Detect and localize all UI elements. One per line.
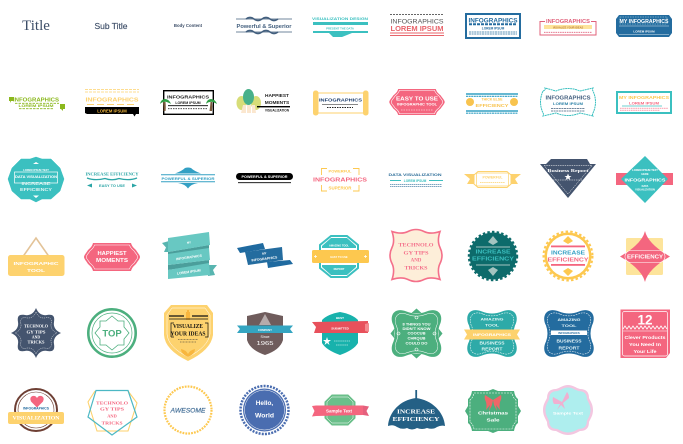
badge: blue frame: [466, 14, 520, 38]
badge: teal diamond on pink band: DATA: [642, 184, 649, 188]
badge: green scalloped card: COOCUB: [408, 332, 426, 336]
badge: green scalloped card: DIDN'T KNOW: [402, 327, 430, 331]
badge: business report triangle: Business Report: [548, 168, 589, 173]
badge: green octagon with pink ribbon: [312, 395, 369, 425]
badge: pink wavy frame: GY TIPS: [404, 252, 429, 256]
badge: green speech bubbles: INFOGRAPHICS: [13, 98, 60, 104]
badge: infographics lorem ipsum red: [390, 14, 444, 36]
badge: dark teal seal: [469, 232, 517, 280]
badge: powerful and superior ornament: POWERFUL & SUPERIOR: [162, 177, 215, 181]
badge: happiest moments plaque: MOMENTS: [96, 258, 129, 264]
badge: business report triangle: [540, 159, 596, 198]
badge: pink frame with yellow bar: [540, 18, 596, 35]
badge: brown shield with ribbon: 1965: [256, 341, 274, 347]
badge: yellow shield: YOUR IDEAS: [170, 330, 206, 338]
badge: teal octagon with yellow band: EASY TO USE: [330, 255, 348, 259]
badge: dark blue quatrefoil: AND: [32, 336, 40, 340]
icon: red bow: [485, 395, 501, 411]
icon: trees and figures: [236, 89, 261, 113]
badge: yellow and black bar: INFOGRAPHICS: [86, 98, 139, 104]
badge: infographics lorem ipsum red: LOREM IPSUM: [390, 26, 444, 33]
badge: my infographics blue: LOREM IPSUM: [633, 30, 655, 34]
badge: yellow shield: VISUALIZE: [173, 323, 203, 330]
badge: happiest moments plaque: HAPPIEST: [97, 251, 127, 257]
badge: yellow and black bar: [85, 90, 139, 116]
badge: pentagons: GY TIPS: [100, 406, 125, 412]
badge: teal scalloped card with yellow ribbon: BUSINESS: [480, 340, 505, 346]
badge: pink wavy frame: TRICKS: [404, 266, 428, 272]
badge: blue frame: INFOGRAPHICS: [468, 18, 518, 24]
badge: teal scalloped card with yellow ribbon: REPORT: [482, 346, 503, 352]
badge: dark blue quatrefoil: [11, 308, 61, 358]
badge: teal wavy frame: INFOGRAPHICS: [546, 96, 591, 102]
badge: teal shield with red ribbon: [312, 312, 369, 355]
badge: teal scalloped card with yellow ribbon: TOOL: [485, 322, 500, 328]
badge: pink frame with yellow bar: INFOGRAPHICS: [546, 19, 591, 25]
badge: pentagons: TECHNOLO: [96, 400, 129, 406]
badge: pink 12 card: Your Life: [634, 349, 657, 354]
badge: powerful and superior: [236, 18, 292, 34]
badge: data visualization: DATA VISUALIZATION: [388, 173, 442, 177]
badge: teal folded ribbon: LOREM IPSUM: [177, 268, 201, 276]
badge: powerful and superior ornament: [161, 168, 215, 188]
badge: powerful and superior: Powerful & Superior: [236, 24, 292, 30]
badge: teal shield with red ribbon: BEST: [336, 316, 344, 320]
badge: teal wavy frame: LOREM IPSUM: [553, 102, 583, 106]
badge: black pill: [236, 173, 293, 183]
badge: green speech bubbles: LOREM IPSUM: [18, 103, 54, 108]
badge: awesome dotted circle: AWESOME: [169, 408, 206, 414]
badge: green scalloped card: CHRQUB: [408, 336, 426, 340]
badge: pink star on yellow square: EFFICIENCY: [627, 254, 664, 260]
badge: teal arrow banner: VISUALIZATION DESIGN: [312, 17, 369, 21]
title: Title: [22, 18, 50, 34]
badge: pink 12 card: [620, 310, 670, 358]
badge: hello world seal: [240, 386, 288, 434]
badge: black frame with palm trees: [160, 91, 217, 114]
badge: blue scalloped card: [544, 310, 594, 357]
badge: dark blue quatrefoil: GY TIPS: [26, 330, 46, 334]
badge: teal scalloped card with yellow ribbon: INFOGRAPHICS: [473, 333, 512, 337]
badge: blue folded ribbon: MY: [262, 251, 267, 256]
body content: Body Content: [174, 23, 203, 28]
badge: umbrella: INCREASE: [397, 410, 435, 416]
badge: dark teal seal: INCREASE: [476, 250, 511, 256]
badge: umbrella: EFFICIENCY: [392, 417, 440, 423]
badge: my infographics blue: MY INFOGRAPHICS: [620, 19, 669, 25]
badge: teal wavy frame: [540, 88, 596, 116]
icon: shells: [466, 98, 518, 106]
badge: teal arrow banner: PRESENT THE DATA: [326, 26, 354, 30]
badge: pink 12 card: Clever Products: [624, 335, 666, 340]
badge: black frame with palm trees: INFOGRAPHICS: [167, 94, 210, 100]
badge: teal folded ribbon: [162, 232, 217, 279]
badge: hello world seal: Hello,: [256, 400, 273, 407]
badge: christmas green label: [465, 389, 521, 433]
badge: teal shield with red ribbon: SUBMITTED: [331, 326, 350, 330]
badge: dark blue quatrefoil: TECHNOLO: [24, 324, 48, 328]
badge: hanging sign: TOOL: [27, 268, 45, 274]
badge: brown shield with ribbon: [237, 312, 293, 355]
badge: blue frame: LOREM IPSUM: [482, 26, 505, 30]
badge: blue and yellow shells: THICK ELSE: [482, 98, 503, 102]
badge: teal octagon with yellow band: [312, 236, 369, 277]
badge: pentagons: TRICKS: [102, 420, 123, 426]
badge: pink scalloped label with bow: Sample Text: [553, 412, 584, 416]
badge: christmas green label: Sale: [487, 418, 500, 423]
badge: green scalloped card: COULD DO: [406, 342, 428, 346]
badge: teal diamond on pink band: [616, 156, 673, 203]
badge: awesome dotted circle: [164, 386, 212, 434]
badge: pink wavy frame: AND: [411, 258, 422, 264]
badge: teal octagon data visualization: LOREM IPSUM TEXT: [23, 168, 49, 172]
badge: blue scalloped card: TOOL: [562, 323, 577, 328]
badge: green speech bubbles: [9, 97, 65, 111]
badge: teal diamond on pink band: VISUALIZATION: [635, 188, 655, 192]
badge: pink 12 card: You Need In: [629, 342, 662, 347]
badge: teal diamond on pink band: INFOGRAPHICS: [624, 178, 666, 182]
badge: brown shield with ribbon: Since: [260, 335, 270, 339]
badge: teal octagon with yellow band: REPORT: [334, 267, 345, 271]
badge: teal folded ribbon: INFOGRAPHICS: [176, 254, 203, 261]
badge: yellow brackets: SUPERIOR: [329, 186, 352, 190]
badge: yellow brackets: INFOGRAPHICS: [313, 178, 367, 184]
badge: happiest moments: HAPPIEST: [265, 93, 289, 99]
badge: green scalloped card: 8 THINGS YOU: [402, 322, 431, 326]
badge: yellow ribbon: [464, 172, 521, 188]
badge: easy to use: EASY TO USE: [396, 96, 438, 102]
badge: teal folded ribbon: MY: [187, 240, 191, 245]
icon: palm trees: [160, 99, 217, 111]
badge: blue scalloped card: BUSINESS: [556, 338, 582, 344]
badge: pentagons: AND: [107, 414, 117, 418]
badge: pink wavy frame: [390, 230, 442, 282]
badge: hanging sign: INFOGRAPHIC: [14, 261, 59, 267]
badge: teal box: LOREM IPSUM: [629, 101, 659, 105]
badge: teal diamond on pink band: HERE: [641, 172, 649, 176]
badge: pink frame with yellow bar: VISUALIZE YOUR IDEAS: [553, 25, 583, 29]
badge: pentagons: [88, 390, 137, 435]
badge: pink 12 card: 12: [637, 312, 653, 328]
badge: yellow seal: INCREASE: [551, 250, 586, 256]
badge: scroll: INFOGRAPHICS: [319, 98, 363, 104]
badge: green scalloped card: [390, 308, 442, 358]
badge: teal octagon data visualization: [8, 157, 64, 202]
badge: data visualization: LOREM IPSUM: [404, 179, 427, 183]
badge: increase efficiency teal ornament: EASY TO USE: [99, 184, 125, 188]
badge: teal octagon data visualization: DATA VISUALIZATION: [15, 175, 57, 179]
badge: yellow shield: [164, 305, 213, 361]
badge: my infographics blue: [616, 15, 672, 37]
badge: teal octagon data visualization: EFFICIENCY: [20, 187, 52, 192]
badge: yellow brackets: [313, 168, 367, 191]
badge: easy to use: INFOGRAPHIC TOOL: [397, 102, 437, 106]
badge: pink scalloped label with bow: [543, 385, 593, 435]
badge: teal octagon with yellow band: AMAZING TOOL: [329, 244, 349, 248]
badge: brown shield with ribbon: COMPANY: [258, 328, 272, 332]
badge: happiest moments: [236, 89, 290, 113]
badge: yellow seal: [544, 232, 592, 280]
badge: teal scalloped card with yellow ribbon: [464, 310, 520, 357]
badge: scroll: [313, 90, 368, 116]
badge: teal octagon data visualization: INCREASE: [22, 181, 51, 186]
badge: green TOP ring: [88, 309, 136, 357]
badge: blue and yellow shells: EFFICIENCY: [476, 103, 509, 108]
icon: heart: [30, 396, 44, 408]
badge: blue and yellow shells: [466, 94, 518, 113]
badge: pink star on yellow square: [620, 231, 670, 282]
badge: yellow and black bar: LOREM IPSUM: [97, 108, 127, 114]
badge: happiest moments plaque: [84, 243, 140, 271]
badge: yellow seal: EFFICIENCY: [548, 258, 589, 264]
badge: increase efficiency teal ornament: [86, 172, 139, 188]
badge: hanging sign: [8, 238, 64, 276]
badge: brown ring visualization: [8, 389, 64, 431]
badge: teal box: MY INFOGRAPHICS: [619, 95, 670, 101]
badge: blue scalloped card: INFOGRAPHICS: [558, 331, 580, 335]
badge: infographics lorem ipsum red: INFOGRAPHICS: [390, 18, 444, 26]
badge: blue folded ribbon: [237, 243, 293, 268]
badge: yellow ribbon: POWERFUL: [482, 176, 503, 180]
badge: easy to use: [389, 89, 445, 115]
badge: blue folded ribbon: INFOGRAPHICS: [251, 255, 278, 263]
badge: brown ring visualization: VISUALIZATION: [12, 416, 60, 422]
badge: green octagon with pink ribbon: Sample Text: [326, 408, 353, 414]
icon: pink bow: [553, 392, 569, 410]
badge: pink wavy frame: TECHNOLO: [398, 244, 434, 248]
badge: happiest moments: VISUALIZATION: [265, 108, 290, 112]
sub title: Sub Title: [94, 21, 128, 31]
badge: teal diamond on pink band: LOREM IPSUM TEXT: [632, 168, 658, 172]
badge: data visualization: [388, 173, 443, 186]
badge: happiest moments: MOMENTS: [265, 100, 290, 106]
badge: dark blue quatrefoil: TRICKS: [28, 340, 44, 344]
badge: teal box: [617, 92, 671, 113]
badge: increase efficiency teal ornament: INCREASE EFFICIENCY: [86, 172, 139, 176]
badge: black pill: POWERFUL & SUPERIOR: [242, 175, 288, 179]
badge: christmas green label: Christmas: [478, 411, 509, 416]
badge: hello world seal: World: [255, 413, 274, 420]
badge: black frame with palm trees: LOREM IPSUM: [175, 101, 201, 105]
badge: blue scalloped card: REPORT: [558, 346, 580, 350]
badge: teal arrow banner: [312, 17, 369, 37]
badge: teal scalloped card with yellow ribbon: AMAZING: [480, 316, 504, 322]
badge: brown ring visualization: INFOGRAPHICS: [23, 406, 49, 410]
badge: yellow brackets: POWERFUL: [329, 168, 352, 174]
badge: dark teal seal: EFFICIENCY: [472, 257, 515, 263]
badge: green TOP ring: TOP: [102, 329, 122, 340]
badge: umbrella: [388, 390, 445, 430]
badge: blue scalloped card: AMAZING: [558, 317, 580, 322]
